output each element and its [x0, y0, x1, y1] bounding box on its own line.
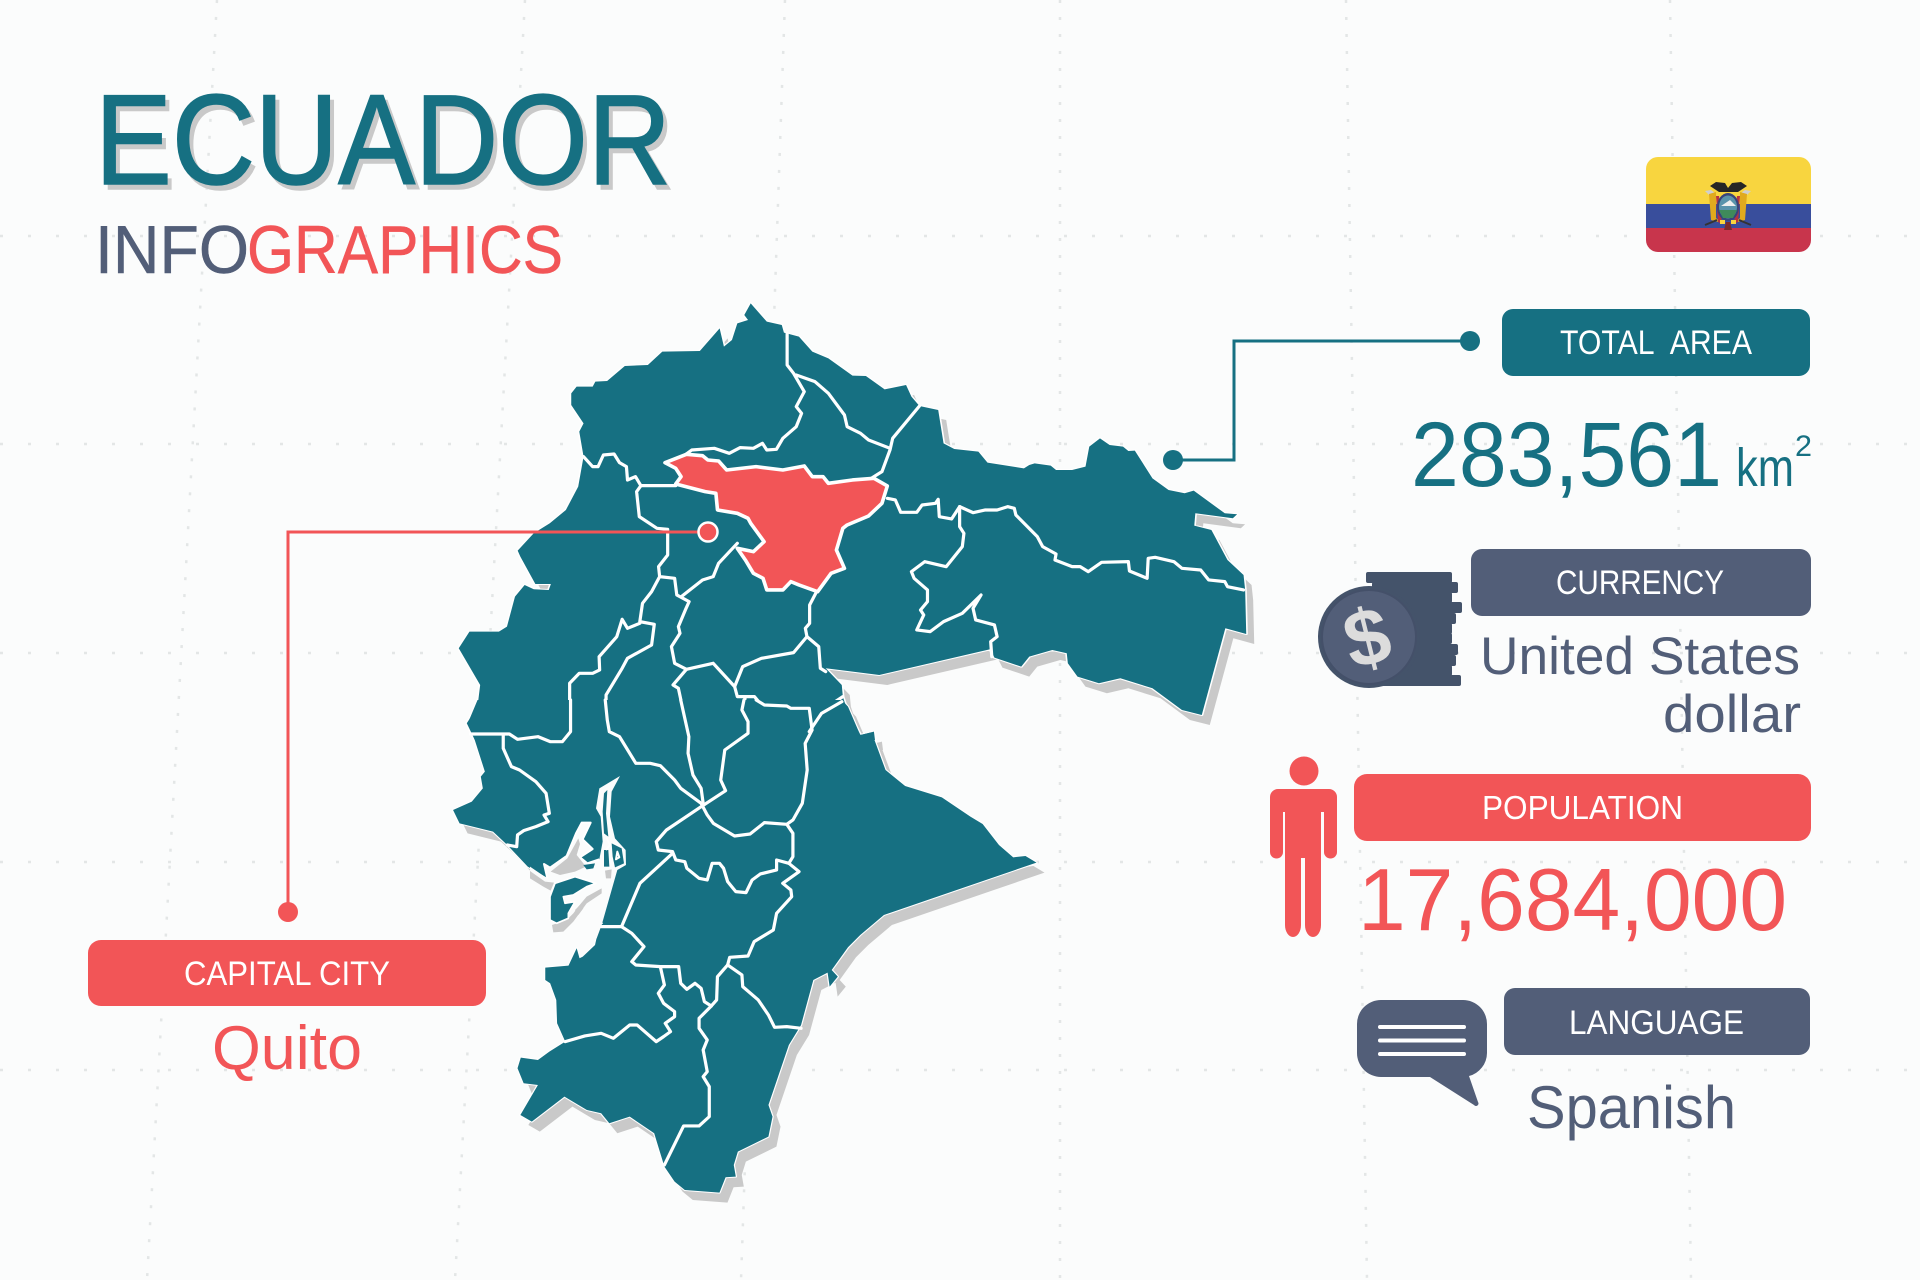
title: ECUADOR: ECUADOR [99, 74, 675, 217]
total area label [1502, 309, 1810, 376]
panel: language [1357, 988, 1810, 1141]
currency label [1471, 549, 1811, 616]
panel: total area [1411, 309, 1812, 506]
map shadow [461, 313, 1254, 1203]
total area label: TOTAL AREA [1560, 324, 1752, 362]
population label [1354, 774, 1811, 841]
language label [1504, 988, 1810, 1055]
currency value: dollar [1663, 685, 1801, 744]
gulf shadows [530, 838, 612, 932]
northern provinces [459, 303, 1246, 740]
area unit: km [1736, 438, 1794, 498]
capital city value: Quito [212, 1014, 362, 1083]
map of Ecuador [453, 303, 1254, 1203]
language value: Spanish [1527, 1074, 1736, 1141]
capital city label: CAPITAL CITY [184, 955, 390, 993]
icon: coins: $ [1335, 589, 1399, 686]
Puna island [550, 877, 596, 923]
panel: capital city [88, 940, 486, 1083]
population value: 17,684,000 [1358, 850, 1787, 949]
currency value: United States [1480, 627, 1800, 686]
icon: coins [1318, 572, 1462, 688]
leader line: total area [1163, 331, 1480, 470]
currency label: CURRENCY [1556, 564, 1724, 602]
total area value: 283,561 [1411, 404, 1722, 506]
subtitle: INFOGRAPHICS: INFO [95, 212, 249, 288]
currency value [1480, 627, 1801, 744]
area unit: 2 [1795, 430, 1812, 463]
leader line: capital city [278, 522, 718, 922]
icon: speech bubble [1357, 1000, 1487, 1106]
subtitle: INFOGRAPHICS [95, 212, 563, 288]
capital city label [88, 940, 486, 1006]
subtitle: INFOGRAPHICS: GRAPHICS [247, 212, 563, 288]
southern provinces [453, 700, 1036, 1193]
icon: flag of Ecuador [1646, 157, 1811, 252]
Gulf of Guayaquil [530, 776, 626, 940]
panel: currency [1318, 549, 1811, 744]
population label: POPULATION [1482, 789, 1683, 826]
language label: LANGUAGE [1569, 1004, 1744, 1042]
icon: person [1270, 756, 1337, 937]
panel: population [1270, 756, 1811, 949]
highlighted province: Pichincha [665, 454, 887, 592]
flag crest [1705, 182, 1751, 230]
title: ECUADOR: ECUADOR [95, 69, 671, 212]
gulf islands [583, 790, 624, 869]
